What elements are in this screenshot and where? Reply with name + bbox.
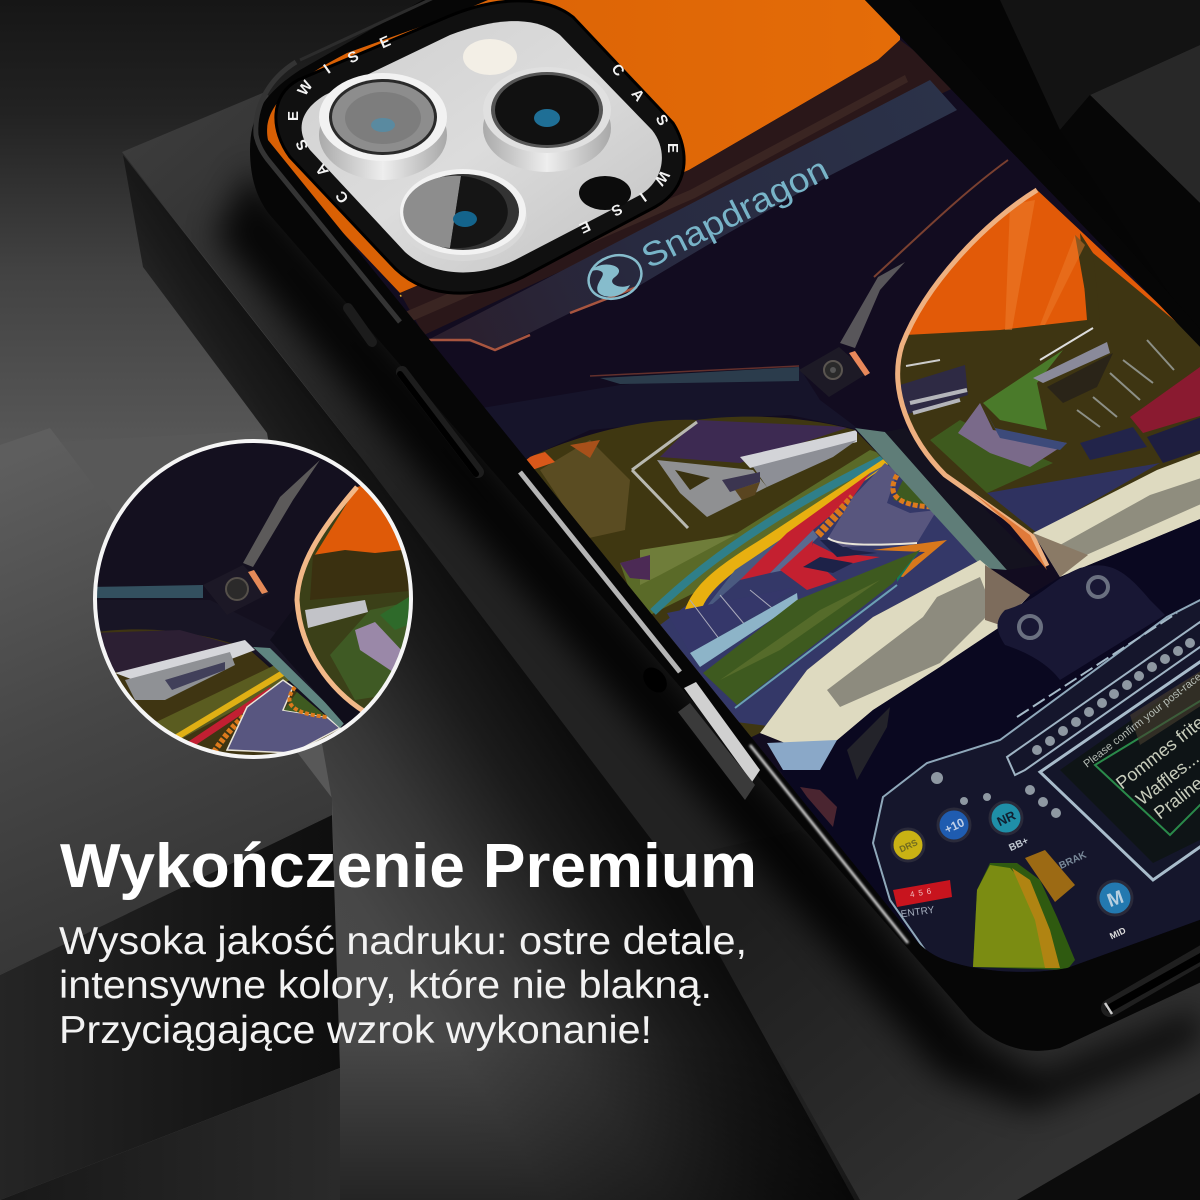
- title: Wykończenie Premium: [60, 832, 757, 901]
- phone: [250, 0, 1200, 1051]
- coloured run-off stripes: [653, 458, 885, 612]
- wheel buttons: NR: [995, 807, 1018, 829]
- crimson: [1130, 367, 1200, 433]
- lens: bottom: [399, 169, 527, 261]
- camera island: [276, 1, 684, 293]
- lower track base: [660, 458, 1000, 730]
- CASEWISE ring lettering: W: [650, 167, 673, 189]
- CASEWISE ring lettering: I: [636, 188, 649, 205]
- metal camera plate: [302, 21, 662, 272]
- CASEWISE ring lettering: E: [285, 111, 302, 121]
- Snapdragon logo: [587, 254, 643, 300]
- cream dashboard hood: [760, 450, 1200, 745]
- white grandstand: [115, 640, 255, 700]
- wheel buttons: MID: [1108, 925, 1128, 941]
- lidar: [579, 176, 631, 210]
- steering wheel: [873, 595, 1200, 1000]
- shift lights: [931, 638, 1195, 818]
- CASEWISE ring lettering: I: [321, 61, 334, 78]
- white ring: [95, 441, 411, 757]
- CASEWISE ring lettering: A: [628, 86, 648, 105]
- right window: track scene: [900, 190, 1200, 534]
- wheel buttons: [892, 802, 1132, 941]
- lens: top left: [319, 73, 447, 180]
- track: [227, 680, 340, 753]
- phone shadow: [215, 170, 1200, 1110]
- CASEWISE ring lettering: S: [652, 112, 671, 129]
- CASEWISE ring lettering: C: [332, 187, 352, 206]
- roof maroon band: [400, 40, 960, 335]
- black lens frame: [276, 1, 684, 293]
- steering hub: [998, 565, 1165, 680]
- CASEWISE ring lettering: E: [577, 217, 593, 236]
- grandstand: [632, 420, 857, 528]
- entry switch: ENTRY: [900, 905, 935, 920]
- CASEWISE ring lettering: [285, 33, 681, 236]
- junction mount: [799, 347, 870, 397]
- CASEWISE ring lettering: W: [294, 77, 317, 99]
- track surface: [828, 463, 937, 547]
- wheel buttons: M: [1104, 887, 1127, 912]
- flash: [463, 39, 517, 75]
- CASEWISE ring lettering: C: [608, 61, 628, 80]
- side buttons: [348, 308, 760, 800]
- orange sky: [255, 0, 900, 293]
- body text: [59, 920, 747, 1052]
- left arm: [90, 585, 203, 598]
- display: [1040, 655, 1200, 880]
- roof lower frame: [90, 600, 345, 720]
- grass bank: [703, 550, 920, 705]
- body text: intensywne kolory, które nie blakną.: [59, 964, 712, 1007]
- charging port: [1105, 950, 1200, 1014]
- entry switch: 456: [909, 886, 936, 899]
- green stalk: [973, 863, 1075, 970]
- wheel buttons: BB+: [1007, 835, 1031, 854]
- detail magnifier circle: [90, 440, 420, 770]
- CASEWISE ring lettering: E: [664, 143, 681, 153]
- stand: [900, 365, 968, 415]
- wheel buttons: BRAK: [1058, 849, 1089, 872]
- CASEWISE ring lettering: S: [345, 48, 362, 67]
- body text: Przyciągające wzrok wykonanie!: [59, 1009, 652, 1052]
- sky: [909, 190, 1176, 335]
- CASEWISE ring lettering: S: [293, 137, 312, 153]
- phone case: [250, 0, 1200, 1051]
- right window: [297, 480, 420, 712]
- mount: [203, 565, 270, 615]
- CASEWISE ring lettering: E: [377, 33, 393, 52]
- wheel buttons: DRS: [898, 837, 919, 854]
- wheel buttons: +10: [942, 815, 967, 837]
- A-pillar: [855, 428, 1007, 570]
- lower left window: [100, 629, 336, 755]
- phone artwork: [250, 0, 1200, 1000]
- cockpit frame arms: [484, 368, 856, 458]
- peach edge: [297, 487, 365, 712]
- Snapdragon wordmark: Snapdragon: [635, 150, 835, 276]
- CASEWISE ring lettering: A: [312, 160, 332, 179]
- yellow and red stripes: [177, 673, 283, 737]
- body text: Wysoka jakość nadruku: ostre detale,: [59, 920, 747, 963]
- peach window edge: [898, 190, 1047, 566]
- left window: track scene: [526, 416, 977, 737]
- edge highlight: [750, 745, 908, 943]
- teal pillar: [253, 647, 345, 728]
- kerb and infield: [893, 480, 926, 506]
- CASEWISE ring lettering: S: [608, 200, 625, 219]
- entry switch: [893, 880, 952, 920]
- cockpit wall: [780, 519, 1200, 769]
- lens: top right: [483, 67, 611, 172]
- Snapdragon strip: [428, 80, 957, 350]
- green and track: [983, 350, 1063, 430]
- spectator stand: [667, 604, 713, 618]
